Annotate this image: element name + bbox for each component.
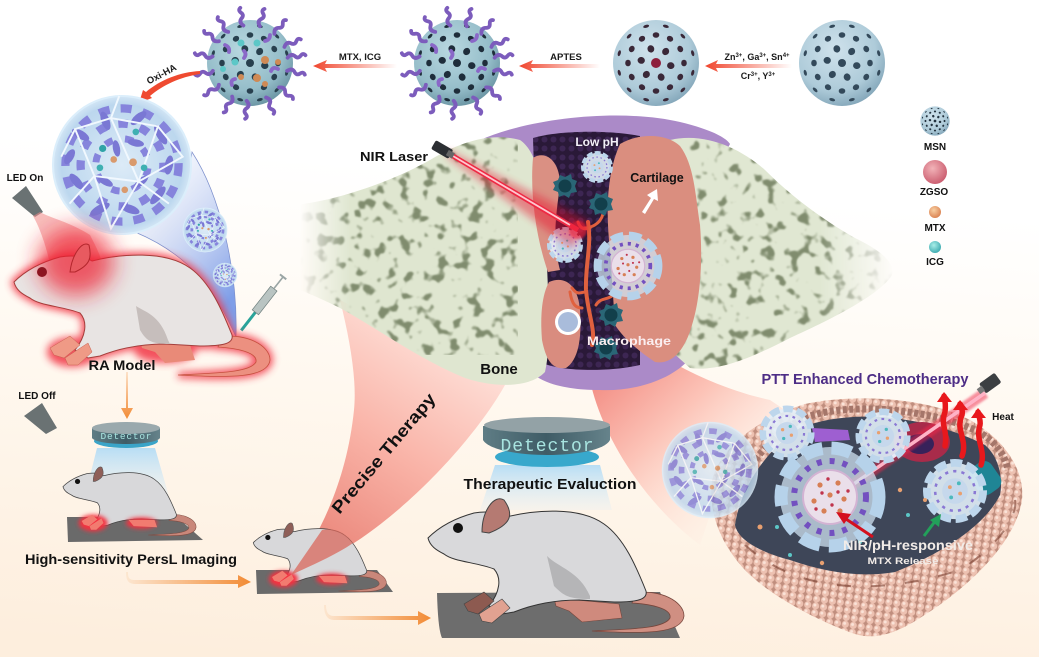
ear <box>93 467 103 481</box>
ion label: Cr <box>741 71 751 81</box>
nanoparticle left <box>549 229 581 261</box>
red pointer <box>843 517 873 537</box>
MSN <box>920 106 950 153</box>
ZGSO-loaded sphere <box>613 20 699 106</box>
imaging detector beam <box>84 448 170 500</box>
ZGSO <box>920 160 948 198</box>
tail <box>339 571 386 592</box>
cytoplasm <box>735 417 1001 574</box>
label RA Model: RA Model <box>88 358 156 373</box>
upper membrane band <box>748 409 1008 470</box>
front paws <box>50 336 92 365</box>
label imaging: High-sensitivity PersL Imaging <box>25 552 237 567</box>
label MTX ICG: MTX, ICG <box>339 52 381 63</box>
arrow: ions <box>705 60 792 72</box>
evaluation detector beam <box>480 465 612 510</box>
green pointer head <box>930 514 941 527</box>
hind feet <box>140 340 195 363</box>
evaluation rat on plate <box>428 499 684 638</box>
synthesis row <box>139 8 885 119</box>
injection cone <box>135 152 236 337</box>
plate <box>437 592 680 638</box>
label Therapeutic Evaluction: Therapeutic Evaluction <box>464 477 636 493</box>
left bone <box>296 130 549 385</box>
label PTT Enhanced Chemotherapy: PTT Enhanced Chemotherapy <box>762 371 969 388</box>
label: Bone: Bone <box>480 361 518 378</box>
pink cone: precise therapy <box>291 300 505 575</box>
tail <box>592 592 684 632</box>
arrow Oxi-HA <box>139 71 200 103</box>
synovial cavity <box>533 132 640 370</box>
arrow to evaluation <box>324 605 431 625</box>
ion label: , Ga <box>742 52 760 62</box>
syringe <box>238 274 287 333</box>
medium nanoparticle <box>183 208 227 252</box>
main nanoparticle <box>780 447 880 547</box>
plate <box>67 517 203 542</box>
label: Macrophage: Macrophage <box>587 334 671 348</box>
MSN sphere <box>799 20 885 106</box>
bead membrane <box>712 398 1022 636</box>
feet glow <box>269 571 347 587</box>
white arrow <box>642 189 658 214</box>
label LED Off: LED Off <box>18 391 56 402</box>
ion label: 3+ <box>768 72 776 78</box>
evaluation detector: Detector <box>500 437 594 457</box>
treatment rat on plate <box>253 523 393 594</box>
label Heat: Heat <box>992 412 1015 423</box>
nanoparticle lower <box>555 309 581 335</box>
body <box>63 473 176 526</box>
feet glow <box>79 515 157 531</box>
label: NIR Laser: NIR Laser <box>360 150 428 164</box>
ion label: 3+ <box>735 53 743 59</box>
evaluation detector <box>483 417 610 467</box>
body <box>253 529 367 582</box>
arrow RA to detector <box>121 372 133 419</box>
nanoparticle outside cell <box>662 422 758 518</box>
label Oxi-HA: Oxi-HA <box>145 62 179 87</box>
nanoparticle center <box>597 235 659 297</box>
nanoparticle right <box>927 463 983 519</box>
haunch shade <box>136 306 170 344</box>
ion label <box>724 52 790 81</box>
ICG <box>926 241 944 268</box>
RA model rat <box>14 228 270 376</box>
feet <box>272 571 347 586</box>
front paws <box>464 592 494 614</box>
ear <box>70 244 90 272</box>
eye <box>37 267 47 277</box>
label APTES: APTES <box>550 52 582 63</box>
dots <box>758 488 927 565</box>
MTX: MTX <box>924 223 946 234</box>
red glow <box>14 255 270 376</box>
label: Low pH: Low pH <box>575 135 619 149</box>
nanoparticle upper <box>859 412 907 460</box>
laser beam <box>845 393 985 490</box>
ion label: 3+ <box>751 72 758 78</box>
red LED beam <box>33 212 102 280</box>
ear <box>482 499 510 533</box>
red pointer head <box>836 512 851 524</box>
large nanoparticle <box>53 96 191 234</box>
imaging rat on plate <box>63 467 203 542</box>
arrow APTES <box>519 60 600 72</box>
laser device <box>431 140 456 160</box>
loaded sphere <box>194 8 306 119</box>
ZGSO: ZGSO <box>920 187 948 198</box>
right cartilage <box>608 136 701 362</box>
capsule <box>480 116 730 390</box>
small nanoparticle <box>213 263 237 287</box>
imaging detector: Detector <box>100 431 152 442</box>
organelles <box>812 422 1005 499</box>
plate <box>256 570 393 594</box>
APTES sphere <box>401 8 513 119</box>
cone overlay on rat <box>291 529 353 575</box>
label Precise Therapy: Precise Therapy <box>328 389 440 517</box>
arrow to treatment <box>126 572 251 588</box>
ion label: Zn <box>724 52 735 62</box>
blood vessels <box>570 214 612 345</box>
nanoparticle low pH <box>583 153 611 181</box>
tail <box>148 515 196 536</box>
MSN: MSN <box>924 142 946 153</box>
macrophage cells <box>553 174 623 360</box>
legend <box>920 106 950 268</box>
hind feet far <box>554 598 622 622</box>
body <box>14 255 232 358</box>
red head glow <box>38 228 114 296</box>
LED lamp on <box>12 186 43 217</box>
green pointer <box>924 520 936 536</box>
label MTX Release: MTX Release <box>868 556 938 567</box>
label: Cartilage: Cartilage <box>630 171 684 185</box>
haunch shade <box>547 556 590 599</box>
heat arrow heads <box>937 392 986 418</box>
laser beam to joint <box>447 150 590 248</box>
ear <box>283 523 294 537</box>
right bone <box>670 130 895 375</box>
tail <box>178 336 270 376</box>
label LED On: LED On <box>7 173 43 184</box>
eye <box>265 535 270 540</box>
cell <box>662 371 1030 645</box>
arrow MTX ICG <box>313 60 397 72</box>
ion label: , Sn <box>766 52 783 62</box>
left cartilage upper <box>532 155 560 272</box>
ICG: ICG <box>926 257 944 268</box>
MTX <box>924 206 946 234</box>
nanoparticles in cell <box>763 409 811 457</box>
imaging detector <box>92 422 160 448</box>
body <box>428 511 646 614</box>
eye <box>453 523 463 533</box>
LED lamp off <box>24 403 57 434</box>
feet <box>82 515 157 530</box>
left cartilage lower <box>541 280 580 368</box>
laser device <box>975 373 1001 396</box>
joint illustration <box>296 116 895 390</box>
pink cone: macrophage to cell <box>590 320 800 545</box>
ion label: 4+ <box>783 53 790 59</box>
ion label: 3+ <box>759 53 767 59</box>
label NIR/pH-responsive: NIR/pH-responsive <box>843 538 974 553</box>
heat arrows <box>943 396 982 465</box>
ion label: , Y <box>758 71 768 81</box>
eye <box>75 479 80 484</box>
